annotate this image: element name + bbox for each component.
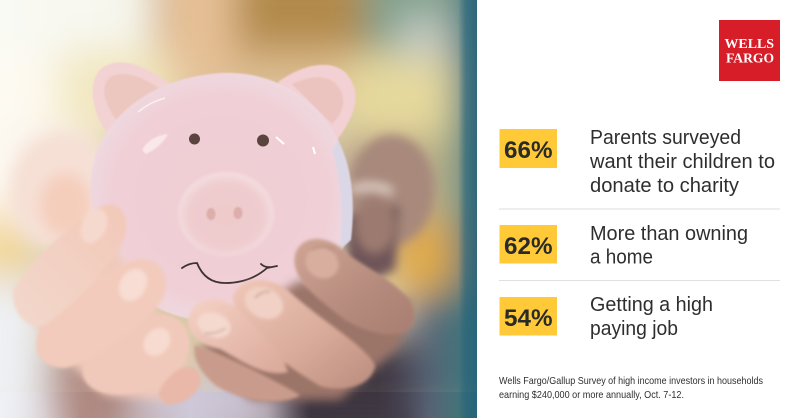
left hand palm behind the pig bbox=[8, 134, 97, 247]
photo: child's hands holding a piggy bank bbox=[0, 0, 505, 418]
pig head bbox=[90, 73, 352, 322]
finger 3 bbox=[83, 315, 190, 394]
highlights on the head bbox=[142, 134, 168, 154]
stat: 66% parents want children to donate: Parents surveyed bbox=[590, 127, 741, 149]
stat: 62% more than owning a home bbox=[500, 223, 748, 268]
stat: 62% more than owning a home: More than owning bbox=[590, 223, 748, 245]
nostrils bbox=[206, 208, 216, 220]
logo: Wells Fargo: FARGO bbox=[726, 52, 774, 66]
footnote: earning $240,000 or more annually, Oct. 7-12. bbox=[499, 389, 684, 401]
footnote bbox=[499, 375, 763, 401]
finger 6 bbox=[188, 299, 288, 373]
logo: Wells Fargo bbox=[719, 20, 780, 81]
left ear bbox=[93, 62, 175, 135]
finger 2 bbox=[36, 259, 166, 368]
finger 4 bbox=[294, 239, 414, 334]
finger 5 bbox=[233, 280, 375, 388]
stat: 66% parents want children to donate: want their children to bbox=[589, 151, 775, 173]
stat: 62% more than owning a home: 62% bbox=[504, 233, 552, 260]
eyes bbox=[189, 134, 200, 144]
right-hand fingers bbox=[188, 239, 414, 401]
panel: survey results bbox=[499, 20, 780, 401]
piggy bank bbox=[90, 62, 356, 322]
top-left light flare bbox=[0, 134, 90, 418]
bottom knuckle bbox=[194, 345, 300, 401]
left-hand fingers bbox=[13, 205, 201, 405]
stat: 54% getting a high paying job: Getting a high bbox=[590, 294, 713, 316]
stat: 54% getting a high paying job: paying job bbox=[590, 318, 678, 340]
logo: Wells Fargo: WELLS bbox=[724, 37, 774, 52]
right photo edge bbox=[458, 0, 477, 418]
stat: 66% parents want children to donate: 66% bbox=[504, 137, 552, 164]
footnote: Wells Fargo/Gallup Survey of high income investors in households bbox=[499, 375, 763, 387]
right ear bbox=[278, 65, 356, 140]
blurred photo background bbox=[0, 0, 505, 418]
left hand base mass bbox=[35, 250, 190, 403]
stat: 62% more than owning a home: a home bbox=[590, 246, 653, 268]
stat: 66% parents want children to donate bbox=[500, 127, 775, 197]
smile bbox=[182, 263, 277, 283]
right hand base mass bbox=[200, 280, 412, 400]
stat: 66% parents want children to donate: donate to charity bbox=[590, 175, 739, 197]
stat: 54% getting a high paying job bbox=[500, 294, 713, 340]
nail crease lines bbox=[205, 247, 334, 333]
lower finger tip bbox=[158, 367, 201, 405]
right hand behind the pig bbox=[345, 135, 434, 290]
stat: 54% getting a high paying job: 54% bbox=[504, 305, 552, 332]
snout bbox=[179, 172, 273, 232]
finger 1 bbox=[13, 205, 126, 326]
